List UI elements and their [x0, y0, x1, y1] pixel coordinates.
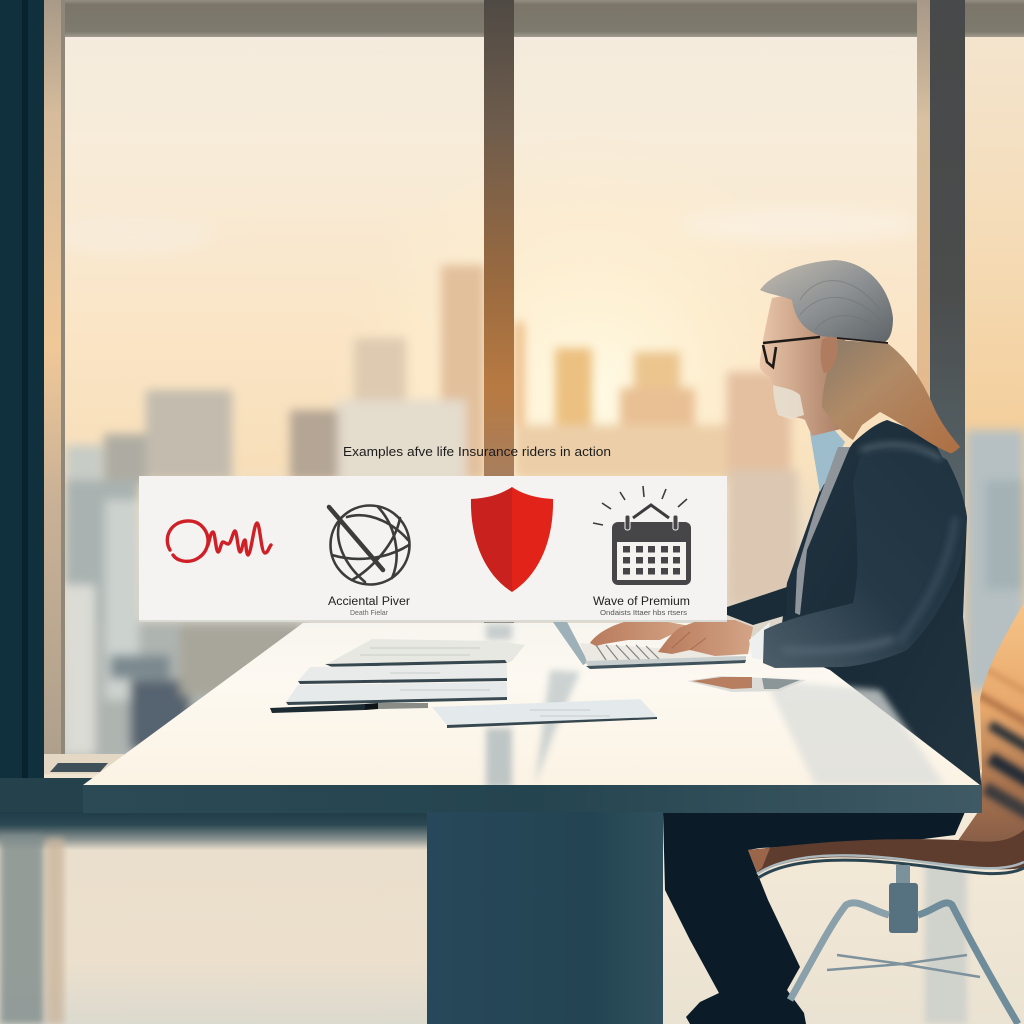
person: sleeve — [763, 450, 967, 668]
person: beard — [773, 385, 804, 419]
panel: riders — [139, 476, 727, 622]
table edge — [83, 785, 982, 813]
person: shirt collar — [810, 425, 845, 492]
table leg — [427, 812, 663, 1024]
person: shirt cuff — [749, 622, 770, 660]
person: hands — [590, 620, 753, 656]
laptop — [538, 580, 746, 669]
label: accidental rider: Death Fielar — [350, 608, 388, 617]
heading: Examples afve life Insurance riders in action — [343, 444, 611, 459]
pen — [270, 703, 428, 713]
person: lapel — [795, 447, 850, 615]
chair: base — [790, 865, 1018, 1024]
person: gray hair — [760, 260, 893, 342]
tablet — [687, 676, 806, 692]
label: waiver of premium — [593, 596, 690, 617]
floor — [0, 812, 1024, 1024]
person: far sleeve — [727, 587, 787, 625]
person: head — [760, 292, 845, 436]
icon: red shield — [471, 487, 553, 592]
chair: back and seat — [748, 603, 1024, 878]
label: waiver of premium: Wave of Premium — [593, 596, 690, 608]
person: glasses — [763, 337, 888, 367]
person: ear — [821, 337, 838, 373]
window frame — [0, 0, 1024, 818]
blurred city skyline — [65, 265, 1024, 760]
table reflections — [486, 624, 945, 788]
table top — [83, 623, 980, 785]
paper stack and documents — [286, 639, 657, 728]
label: accidental rider — [328, 596, 410, 617]
label: waiver of premium: Ondaists Ittaer hbs rtsers — [600, 608, 687, 617]
person: torso — [780, 420, 982, 790]
label: accidental rider: Acciental Piver — [328, 596, 410, 608]
icon: heartbeat circle — [167, 521, 271, 561]
person: trousers — [663, 812, 965, 1024]
person: long hair — [822, 340, 960, 453]
person: sleeve highlights — [785, 445, 955, 651]
icon: globe with slash — [329, 506, 410, 584]
icon: calendar — [593, 486, 691, 585]
window sky background — [0, 0, 1024, 770]
